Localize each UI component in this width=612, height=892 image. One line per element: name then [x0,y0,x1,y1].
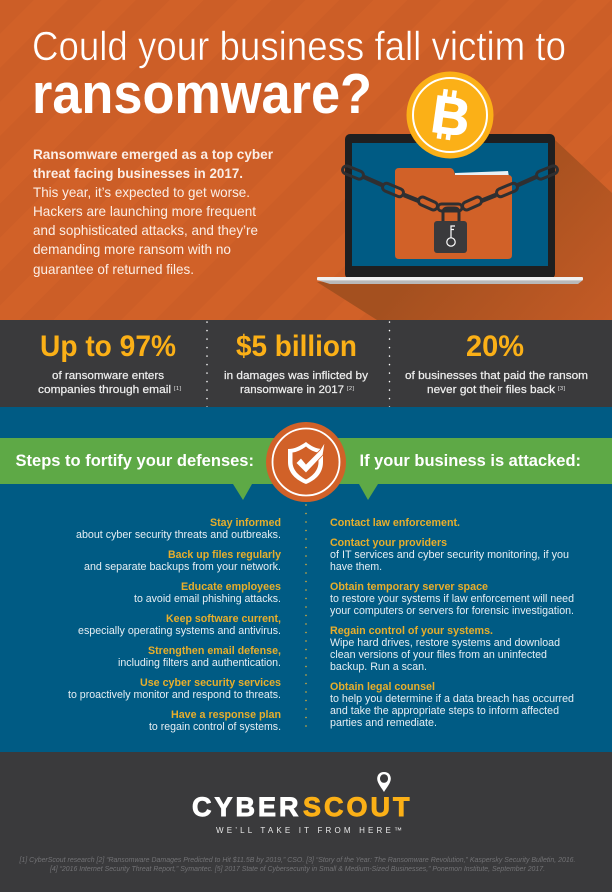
footnotes: [4] “2016 Internet Security Threat Report,” Symantec. [5] 2017 State of Cybersecurity in Small & Medium-Sized Businesses,” Ponemon Institute, September 2017. [49,866,545,873]
stat: 20 percent: [3] [558,386,565,392]
logo: CyberScout [192,772,412,835]
step: response plan: Have a response plan [171,709,281,721]
stat: 20 percent: never got their files back [427,384,556,396]
title [32,23,566,126]
step: strengthen email defense: Strengthen email defense, [148,645,281,657]
footnotes [19,857,576,873]
laptop screen [345,134,555,279]
intro text block: threat facing businesses in 2017. [33,165,243,181]
title: Could your business fall victim to [32,23,566,69]
list: if attacked [330,517,574,729]
panel: footer [0,752,612,892]
stat: 97 percent: Up to 97% [40,330,176,363]
icon: shield with check [266,422,346,502]
step: back up files: Back up files regularly [168,549,282,561]
icon: bitcoin coin [406,72,494,158]
stat: 5 billion: $5 billion [236,330,357,363]
step: keep software current: especially operating systems and antivirus. [78,625,281,637]
step: strengthen email defense: including filters and authentication. [118,657,281,669]
action: legal counsel: parties and remediate. [330,717,437,729]
action: legal counsel: Obtain legal counsel [330,681,435,693]
step: use cyber security services [68,677,281,701]
intro text block: Hackers are launching more frequent [33,203,256,219]
icon: locked laptop [317,72,612,320]
action: regain control [330,625,560,673]
action: regain control: Regain control of your systems. [330,625,493,637]
green heading band [0,438,612,500]
stat: 5 billion: [2] [347,386,354,392]
action: temporary server space [330,581,574,617]
action: temporary server space: your computers or servers for forensic investigation. [330,605,574,617]
step: back up files: and separate backups from your network. [84,561,281,573]
stat: 97 percent: companies through email [38,384,171,396]
logo: CyberScout: SCOUT [303,792,412,822]
logo: CyberScout: WE’LL TAKE IT FROM HERE™ [216,826,402,835]
intro text block: guarantee of returned files. [33,261,194,277]
step: stay informed [76,517,281,541]
action: legal counsel [330,681,574,729]
step: use cyber security services: to proactively monitor and respond to threats. [68,689,281,701]
step: stay informed: Stay informed [210,517,281,529]
icon: chain [341,165,559,211]
footnotes: [1] CyberScout research [2] “Ransomware Damages Predicted to Hit $11.5B by 2019,” CSO. [3] “Story of the Year: The Ransomware Revolution,” Kaspersky Security Bulletin, 2016. [19,857,576,864]
action: legal counsel: and take the appropriate steps to inform affected [330,705,559,717]
action: regain control: Wipe hard drives, restore systems and download [330,637,560,649]
step: use cyber security services: Use cyber security services [140,677,281,689]
step: response plan: to regain control of systems. [149,721,281,733]
step: educate employees [134,581,281,605]
laptop shadow [317,140,612,320]
list: steps to fortify defenses [68,517,282,733]
action: contact providers: Contact your providers [330,537,447,549]
action: law enforcement: Contact law enforcement. [330,517,460,529]
panel: blue steps section [0,407,612,752]
stat: 97 percent: of ransomware enters [52,370,165,382]
stat: 5 billion [224,330,369,396]
intro text block: and sophisticated attacks, and they’re [33,222,258,238]
action: contact providers: have them. [330,561,382,573]
step: response plan [149,709,281,733]
stat: 97 percent [38,330,181,396]
logo: CyberScout: CYBER [192,792,302,822]
action: contact providers: of IT services and cyber security monitoring, if you [330,549,569,561]
action: temporary server space: Obtain temporary server space [330,581,488,593]
intro text block: Ransomware emerged as a top cyber [33,146,274,162]
stat: 97 percent: [1] [174,386,181,392]
action: legal counsel: to help you determine if a data breach has occurred [330,693,574,705]
icon: padlock [434,208,467,253]
laptop base [317,277,583,284]
intro text block: This year, it’s expected to get worse. [33,184,250,200]
intro text block [33,146,274,277]
stat: 5 billion: in damages was inflicted by [224,370,369,382]
panel: statistics band [0,320,612,407]
step: strengthen email defense [118,645,281,669]
action: temporary server space: to restore your systems if law enforcement will need [330,593,574,605]
action: regain control: backup. Run a scan. [330,661,427,673]
stat: 20 percent [405,330,588,396]
action: contact providers [330,537,569,573]
step: educate employees: to avoid email phishing attacks. [134,593,281,605]
stat: 20 percent: of businesses that paid the ransom [405,370,588,382]
heading: steps to fortify: Steps to fortify your defenses: [16,451,254,470]
step: back up files [84,549,282,573]
panel: orange hero [0,0,612,320]
step: keep software current [78,613,281,637]
step: stay informed: about cyber security threats and outbreaks. [76,529,281,541]
stat: 5 billion: ransomware in 2017 [240,384,344,396]
stat: 20 percent: 20% [466,330,524,363]
title: ransomware? [32,62,372,126]
step: educate employees: Educate employees [181,581,281,593]
heading: if attacked: If your business is attacked: [360,451,581,470]
action: regain control: clean versions of your files from an uninfected [330,649,547,661]
icon: map pin [377,772,391,792]
step: keep software current: Keep software current, [166,613,281,625]
intro text block: demanding more ransom with no [33,241,231,257]
icon: folder [395,168,512,259]
icon: bitcoin coin: B [428,85,474,149]
